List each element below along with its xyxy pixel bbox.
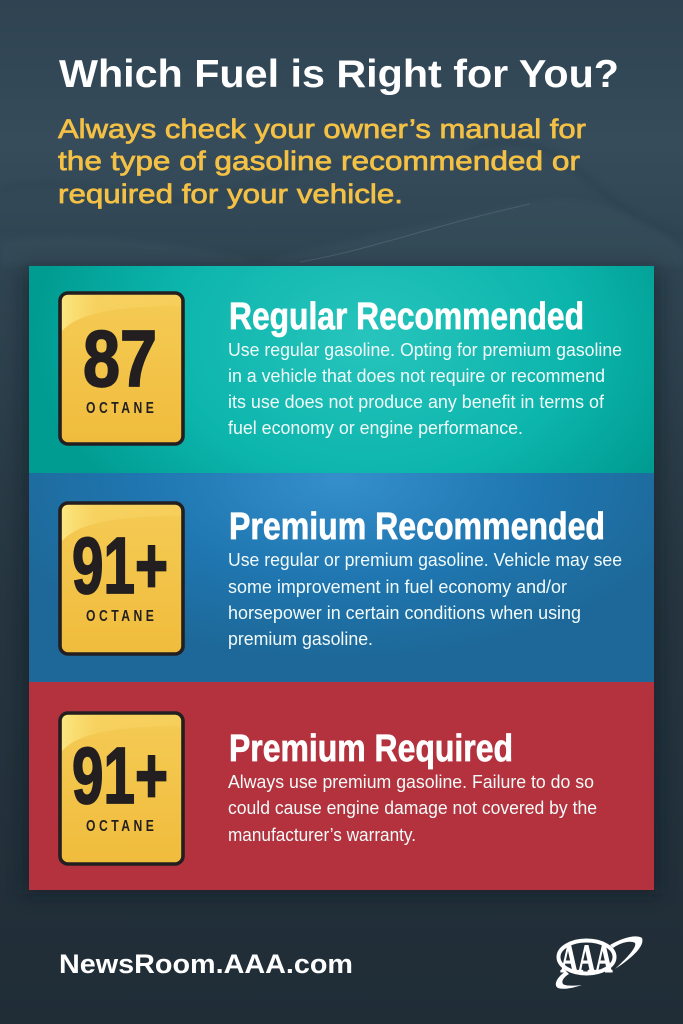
text: premium required: could cause engine damage not covered by the [228, 798, 597, 818]
text: regular recommended [228, 340, 622, 438]
badge: 91+ octane: 91+ [72, 731, 168, 820]
badge: 91+ octane: OCTANE [86, 817, 157, 836]
badge: 91+ octane [60, 713, 183, 864]
text: regular recommended: fuel economy or engine performance. [228, 418, 523, 438]
text: premium recommended: Use regular or premium gasoline. Vehicle may see [228, 550, 622, 570]
text: premium required: Always use premium gasoline. Failure to do so [228, 772, 594, 792]
heading: premium required: Premium Required [229, 728, 513, 770]
badge: 91+ octane: OCTANE [86, 607, 157, 626]
badge: 91+ octane: 91+ [72, 521, 168, 610]
text: premium recommended [228, 550, 622, 649]
text: regular recommended: in a vehicle that does not require or recommend [228, 366, 605, 386]
panel shadow [25, 270, 658, 894]
logo: AAA: AAA [560, 936, 613, 981]
panel: regular recommended [29, 266, 654, 473]
badge: 91+ octane [60, 503, 183, 654]
text: premium recommended: some improvement in fuel economy and/or [228, 577, 567, 597]
badge: 87 octane: OCTANE [86, 399, 157, 418]
panel: premium required [29, 682, 654, 890]
text: premium recommended: premium gasoline. [228, 629, 373, 649]
subtitle: required for your vehicle. [58, 179, 403, 209]
subtitle: Always check your owner’s manual for [58, 114, 586, 144]
title: Which Fuel is Right for You? [59, 53, 619, 96]
badge: 87 octane: 87 [83, 314, 157, 403]
subtitle: the type of gasoline recommended or [58, 146, 580, 176]
badge: 87 octane [60, 293, 183, 444]
heading: regular recommended: Regular Recommended [229, 296, 584, 338]
text: premium recommended: horsepower in certain conditions when using [228, 603, 581, 623]
heading: premium recommended: Premium Recommended [229, 506, 605, 548]
panel: premium recommended [29, 473, 654, 682]
text: regular recommended: its use does not produce any benefit in terms of [228, 392, 605, 412]
footer url: NewsRoom.AAA.com [59, 949, 353, 979]
text: premium required [228, 772, 597, 845]
subtitle [58, 114, 586, 209]
text: premium required: manufacturer’s warranty. [228, 825, 416, 845]
text: regular recommended: Use regular gasoline. Opting for premium gasoline [228, 340, 622, 360]
